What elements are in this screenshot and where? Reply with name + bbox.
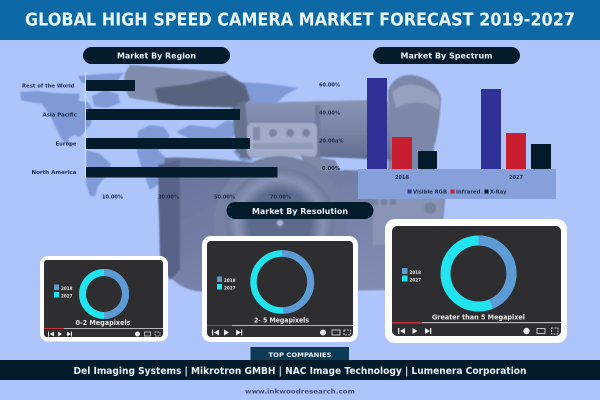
lens [214, 156, 346, 288]
support arm [300, 155, 345, 182]
heading: market by resolution [226, 202, 374, 219]
video card: 0-2 megapixels: 2027 [61, 294, 72, 300]
player controls [48, 332, 160, 336]
bar chart: market by region: 70.00% [270, 194, 291, 200]
video card: 2-5 megapixels [202, 236, 358, 342]
bar chart: market by region: 50.00% [214, 194, 235, 200]
control panel [247, 123, 317, 157]
bar chart: market by spectrum: 20.00a% [319, 138, 344, 144]
video card: greater than 5 megapixel: Greater than 5 Megapixel [432, 314, 525, 322]
title banner [0, 0, 600, 40]
video card: 0-2 megapixels: 2018 [61, 286, 72, 292]
video card: 2-5 megapixels: 2018 [224, 278, 236, 284]
donut chart [446, 240, 512, 306]
heading: market by resolution: Market By Resolution [252, 207, 348, 216]
world map backdrop [20, 73, 298, 196]
player controls [212, 330, 350, 336]
video card: 0-2 megapixels [40, 256, 168, 342]
companies band: Del Imaging Systems | Mikrotron GMBH | NAC Image Technology | Lumenera Corporation [74, 366, 526, 377]
bar chart: market by region: Asia Pacific [42, 112, 77, 118]
video card: 2-5 megapixels: 2- 5 Megapixels [254, 316, 309, 324]
legend: spectrum: Infrared [456, 190, 481, 196]
heading: market by region [83, 47, 230, 64]
video card: 0-2 megapixels: 0-2 Megapixels [76, 319, 130, 327]
video card: greater than 5 megapixel [385, 219, 567, 343]
camera backdrop illustration [124, 65, 445, 292]
bar chart: market by spectrum: 2018 [395, 175, 409, 181]
bar chart: market by region: Rest of the World [22, 84, 75, 90]
bar chart: market by region: Europe [56, 142, 77, 148]
heading: market by spectrum: Market By Spectrum [400, 52, 492, 60]
heading: market by spectrum [373, 47, 520, 64]
bar chart: market by region: 10.00% [102, 194, 123, 200]
bar chart: market by region [22, 72, 291, 200]
player controls [398, 328, 558, 334]
bar chart: market by spectrum: 0.00% [322, 166, 340, 172]
companies band [0, 360, 600, 380]
top barrel [124, 65, 250, 108]
bar chart: market by region: 30.00% [158, 194, 179, 200]
website url: www.inkwoodresearch.com [245, 388, 355, 396]
video card: greater than 5 megapixel: 2027 [410, 278, 421, 284]
camera body [158, 158, 445, 292]
top companies tab [250, 347, 349, 361]
legend: spectrum [408, 190, 507, 196]
top companies tab: TOP COMPANIES [268, 351, 332, 359]
bar chart: market by spectrum: 40.00% [319, 110, 340, 116]
handle [240, 100, 392, 160]
bar chart: market by spectrum: 2027 [509, 175, 523, 181]
bar chart: market by region: North America [32, 170, 77, 176]
bar chart: market by spectrum: 60.00% [319, 82, 340, 88]
legend: spectrum: X-Ray [490, 190, 507, 196]
video card: 2-5 megapixels: 2027 [224, 286, 236, 292]
donut chart [254, 253, 311, 310]
donut chart [82, 272, 126, 316]
video card: greater than 5 megapixel: 2018 [410, 270, 421, 276]
bar chart: market by spectrum [319, 78, 556, 199]
heading: market by region: Market By Region [117, 52, 196, 60]
legend: spectrum: Visible RGB [413, 190, 447, 196]
eyepiece [388, 75, 441, 170]
